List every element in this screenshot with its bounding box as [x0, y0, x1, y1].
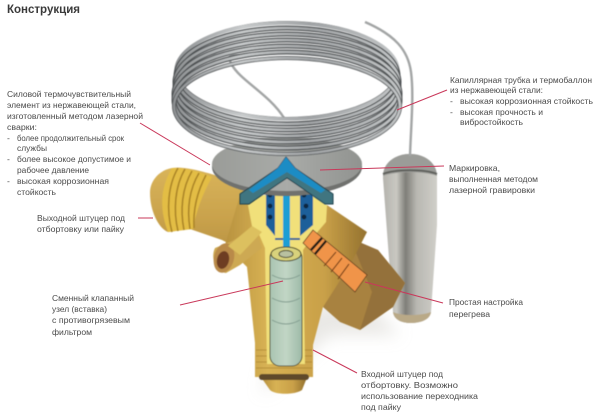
callout text: power element: службы	[17, 143, 47, 153]
callout text: capillary tube and bulb: из нержавеющей стали:	[450, 85, 543, 95]
callout text: marking: выполненная методом	[449, 174, 538, 184]
callout text: inlet fitting	[361, 369, 478, 412]
callout text: replaceable cartridge: узел (вставка)	[52, 304, 107, 314]
callout text: power element: стойкость	[17, 187, 57, 197]
callout text: outlet fitting: Выходной штуцер под	[37, 213, 125, 223]
callout lines	[138, 90, 447, 373]
callout text: superheat adjustment: Простая настройка	[449, 297, 523, 307]
callout text: power element: более продолжительный срок	[17, 133, 124, 143]
callout text: power element	[7, 89, 143, 197]
callout text: capillary tube and bulb	[450, 75, 594, 127]
callout text: inlet fitting: Входной штуцер под	[361, 369, 443, 379]
callout text: capillary tube and bulb: вибростойкость	[460, 117, 524, 127]
adjustment nut	[323, 238, 405, 330]
callout text: superheat adjustment: перегрева	[449, 309, 490, 319]
callout text: capillary tube and bulb: -	[450, 107, 453, 117]
spring chamber	[266, 190, 313, 240]
callout text: power element: высокая коррозионная	[17, 176, 109, 186]
callout text: power element: изготовленный методом лазерной	[7, 111, 143, 121]
icon: sensing bulb	[383, 154, 437, 323]
valve illustration	[150, 22, 437, 395]
callout text: superheat adjustment	[449, 297, 523, 319]
inlet thread and tip	[256, 350, 312, 368]
callout text: replaceable cartridge: Сменный клапанный	[52, 293, 134, 303]
replaceable cartridge	[270, 248, 302, 366]
callout text: power element: -	[7, 133, 10, 143]
callout text: capillary tube and bulb: высокая коррозионная стойкость	[460, 96, 594, 106]
icon: inner tube loop	[230, 55, 284, 118]
callout text: marking: Маркировка,	[449, 163, 500, 173]
callout text: power element: сварки:	[7, 122, 37, 132]
callout text: power element: -	[7, 176, 10, 186]
icon: outlet thread fitting	[150, 168, 290, 270]
callout text: power element: Силовой термочувствительный	[7, 89, 131, 99]
callout text: capillary tube and bulb: Капиллярная трубка и термобаллон	[450, 75, 592, 85]
drop shadow	[262, 300, 400, 395]
callout text: replaceable cartridge: фильтром	[52, 327, 92, 337]
callout text: capillary tube and bulb: -	[450, 96, 453, 106]
valve body	[225, 195, 367, 377]
callout text: power element: более высокое допустимое и	[17, 154, 131, 164]
icon: power element diaphragm	[212, 137, 362, 204]
callout text: power element: элемент из нержавеющей стали,	[7, 100, 136, 110]
callout text: capillary tube and bulb: высокая прочность и	[460, 107, 543, 117]
callout text: inlet fitting: отбортовку. Возможно	[361, 380, 458, 390]
callout text: inlet fitting: под пайку	[361, 402, 402, 412]
callout text: outlet fitting: отбортовку или пайку	[37, 224, 125, 234]
callout text: marking: лазерной гравировки	[449, 185, 535, 195]
icon: capillary tube	[365, 22, 412, 156]
callout text: marking	[449, 163, 538, 195]
orange adjustment spindle	[303, 230, 367, 292]
icon: capillary coil	[174, 22, 400, 154]
callout text: inlet fitting: использование переходника	[361, 391, 478, 401]
callout text: replaceable cartridge	[52, 293, 134, 337]
small side port	[213, 228, 262, 273]
callout text: power element: рабочее давление	[17, 165, 89, 175]
title: Конструкция	[7, 4, 80, 16]
callout text: outlet fitting	[37, 213, 125, 234]
yellow cutaway interior	[248, 195, 327, 364]
callout text: replaceable cartridge: с противогрязевым	[52, 315, 130, 325]
callout text: power element: -	[7, 154, 10, 164]
